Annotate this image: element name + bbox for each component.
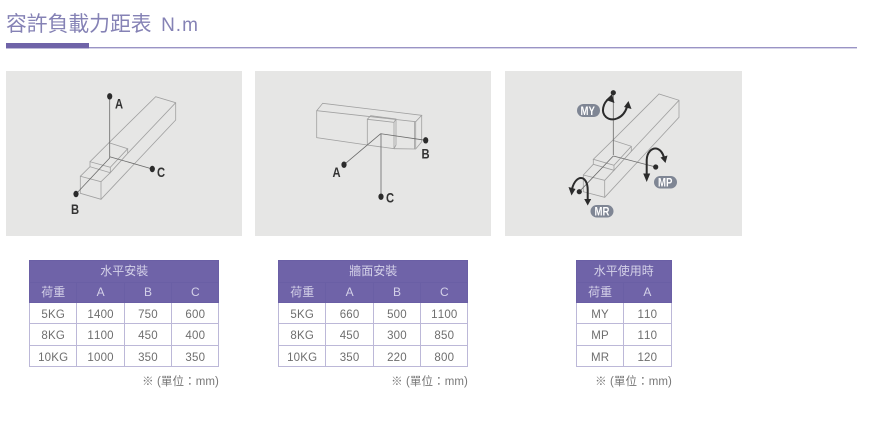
table: wall installation: 350 [340,352,359,364]
badge MP: MP [658,177,672,190]
table: wall installation: 850 [434,330,454,342]
axis A: A [115,96,123,112]
table: wall installation [278,260,468,367]
title underline [6,43,857,48]
table: wall installation: C [440,284,449,298]
table: horizontal installation: 5KG [41,308,65,320]
note: unit for table 2: ※ (單位：mm) [391,376,468,388]
table: wall installation: 牆面安裝 [349,264,397,278]
table: horizontal use moments: 水平使用時 [594,264,654,278]
table: horizontal use moments: MY [591,308,609,320]
table: horizontal installation: 1100 [87,330,114,342]
badge MR: MR [594,206,610,219]
axis B [381,134,430,162]
table: horizontal installation [29,260,219,367]
table: horizontal installation: 水平安裝 [100,264,148,278]
moment MP [643,148,677,190]
table: horizontal installation: 350 [185,352,205,364]
title: 容許負載力距表 N.m [6,13,199,36]
table: wall installation: 8KG [290,330,314,342]
table: horizontal installation: 400 [185,330,205,342]
panel: wall installation diagram [255,71,491,236]
axis C: C [386,190,394,206]
table: horizontal installation: 8KG [41,330,65,342]
table: horizontal installation: 450 [138,330,158,342]
icon: wall beam and carriage wireframe [317,103,422,149]
table: wall installation: 220 [387,352,407,364]
table: horizontal installation: 1400 [87,308,114,320]
table: wall installation: 500 [387,308,407,320]
axis A [107,93,123,158]
axis B: B [422,146,430,162]
table: wall installation: 10KG [287,352,317,364]
table: horizontal installation: C [191,284,200,298]
table: horizontal installation: 600 [185,308,205,320]
table: wall installation: 300 [387,330,407,342]
note: unit for table 3: ※ (單位：mm) [595,376,672,388]
badge MY: MY [580,105,596,118]
panel: horizontal installation diagram [6,71,242,236]
table: horizontal installation: 荷重 [41,285,65,299]
axis C [378,134,394,206]
table: horizontal use moments: A [643,284,651,298]
table: wall installation: 5KG [290,308,314,320]
axis A: A [332,165,341,180]
table: horizontal use moments: 110 [637,308,657,320]
table: horizontal installation: 750 [138,308,158,320]
moment MR [568,178,614,219]
table: horizontal use moments: 荷重 [588,285,612,299]
axis C: C [157,165,165,180]
table: horizontal installation: 10KG [38,352,68,364]
table: wall installation: 450 [340,330,359,342]
panel: horizontal use moment diagram [505,71,742,236]
table: wall installation: 荷重 [290,285,314,299]
table: horizontal installation: A [97,284,105,298]
moment MY [577,90,632,119]
table: horizontal use moments: MR [591,352,609,364]
table: wall installation: 1100 [431,308,458,320]
table: wall installation: 660 [340,308,359,320]
table: horizontal installation: B [144,284,152,298]
table: horizontal use moments: 110 [637,330,657,342]
table: horizontal installation: 1000 [87,352,114,364]
icon: beam and carriage wireframe [579,93,679,197]
table: wall installation: B [393,284,401,298]
table: horizontal use moments: 120 [637,352,657,364]
table: horizontal use moments [576,260,672,367]
table: horizontal installation: 350 [138,352,158,364]
axis B: B [71,202,79,217]
icon: beam and carriage wireframe [80,97,176,199]
table: wall installation: 800 [434,352,454,364]
table: horizontal use moments: MP [591,330,609,342]
note: unit for table 1: ※ (單位：mm) [142,376,219,388]
axis A [332,134,381,180]
axis B [71,158,110,217]
table: wall installation: A [346,284,354,298]
axis C [110,157,165,180]
